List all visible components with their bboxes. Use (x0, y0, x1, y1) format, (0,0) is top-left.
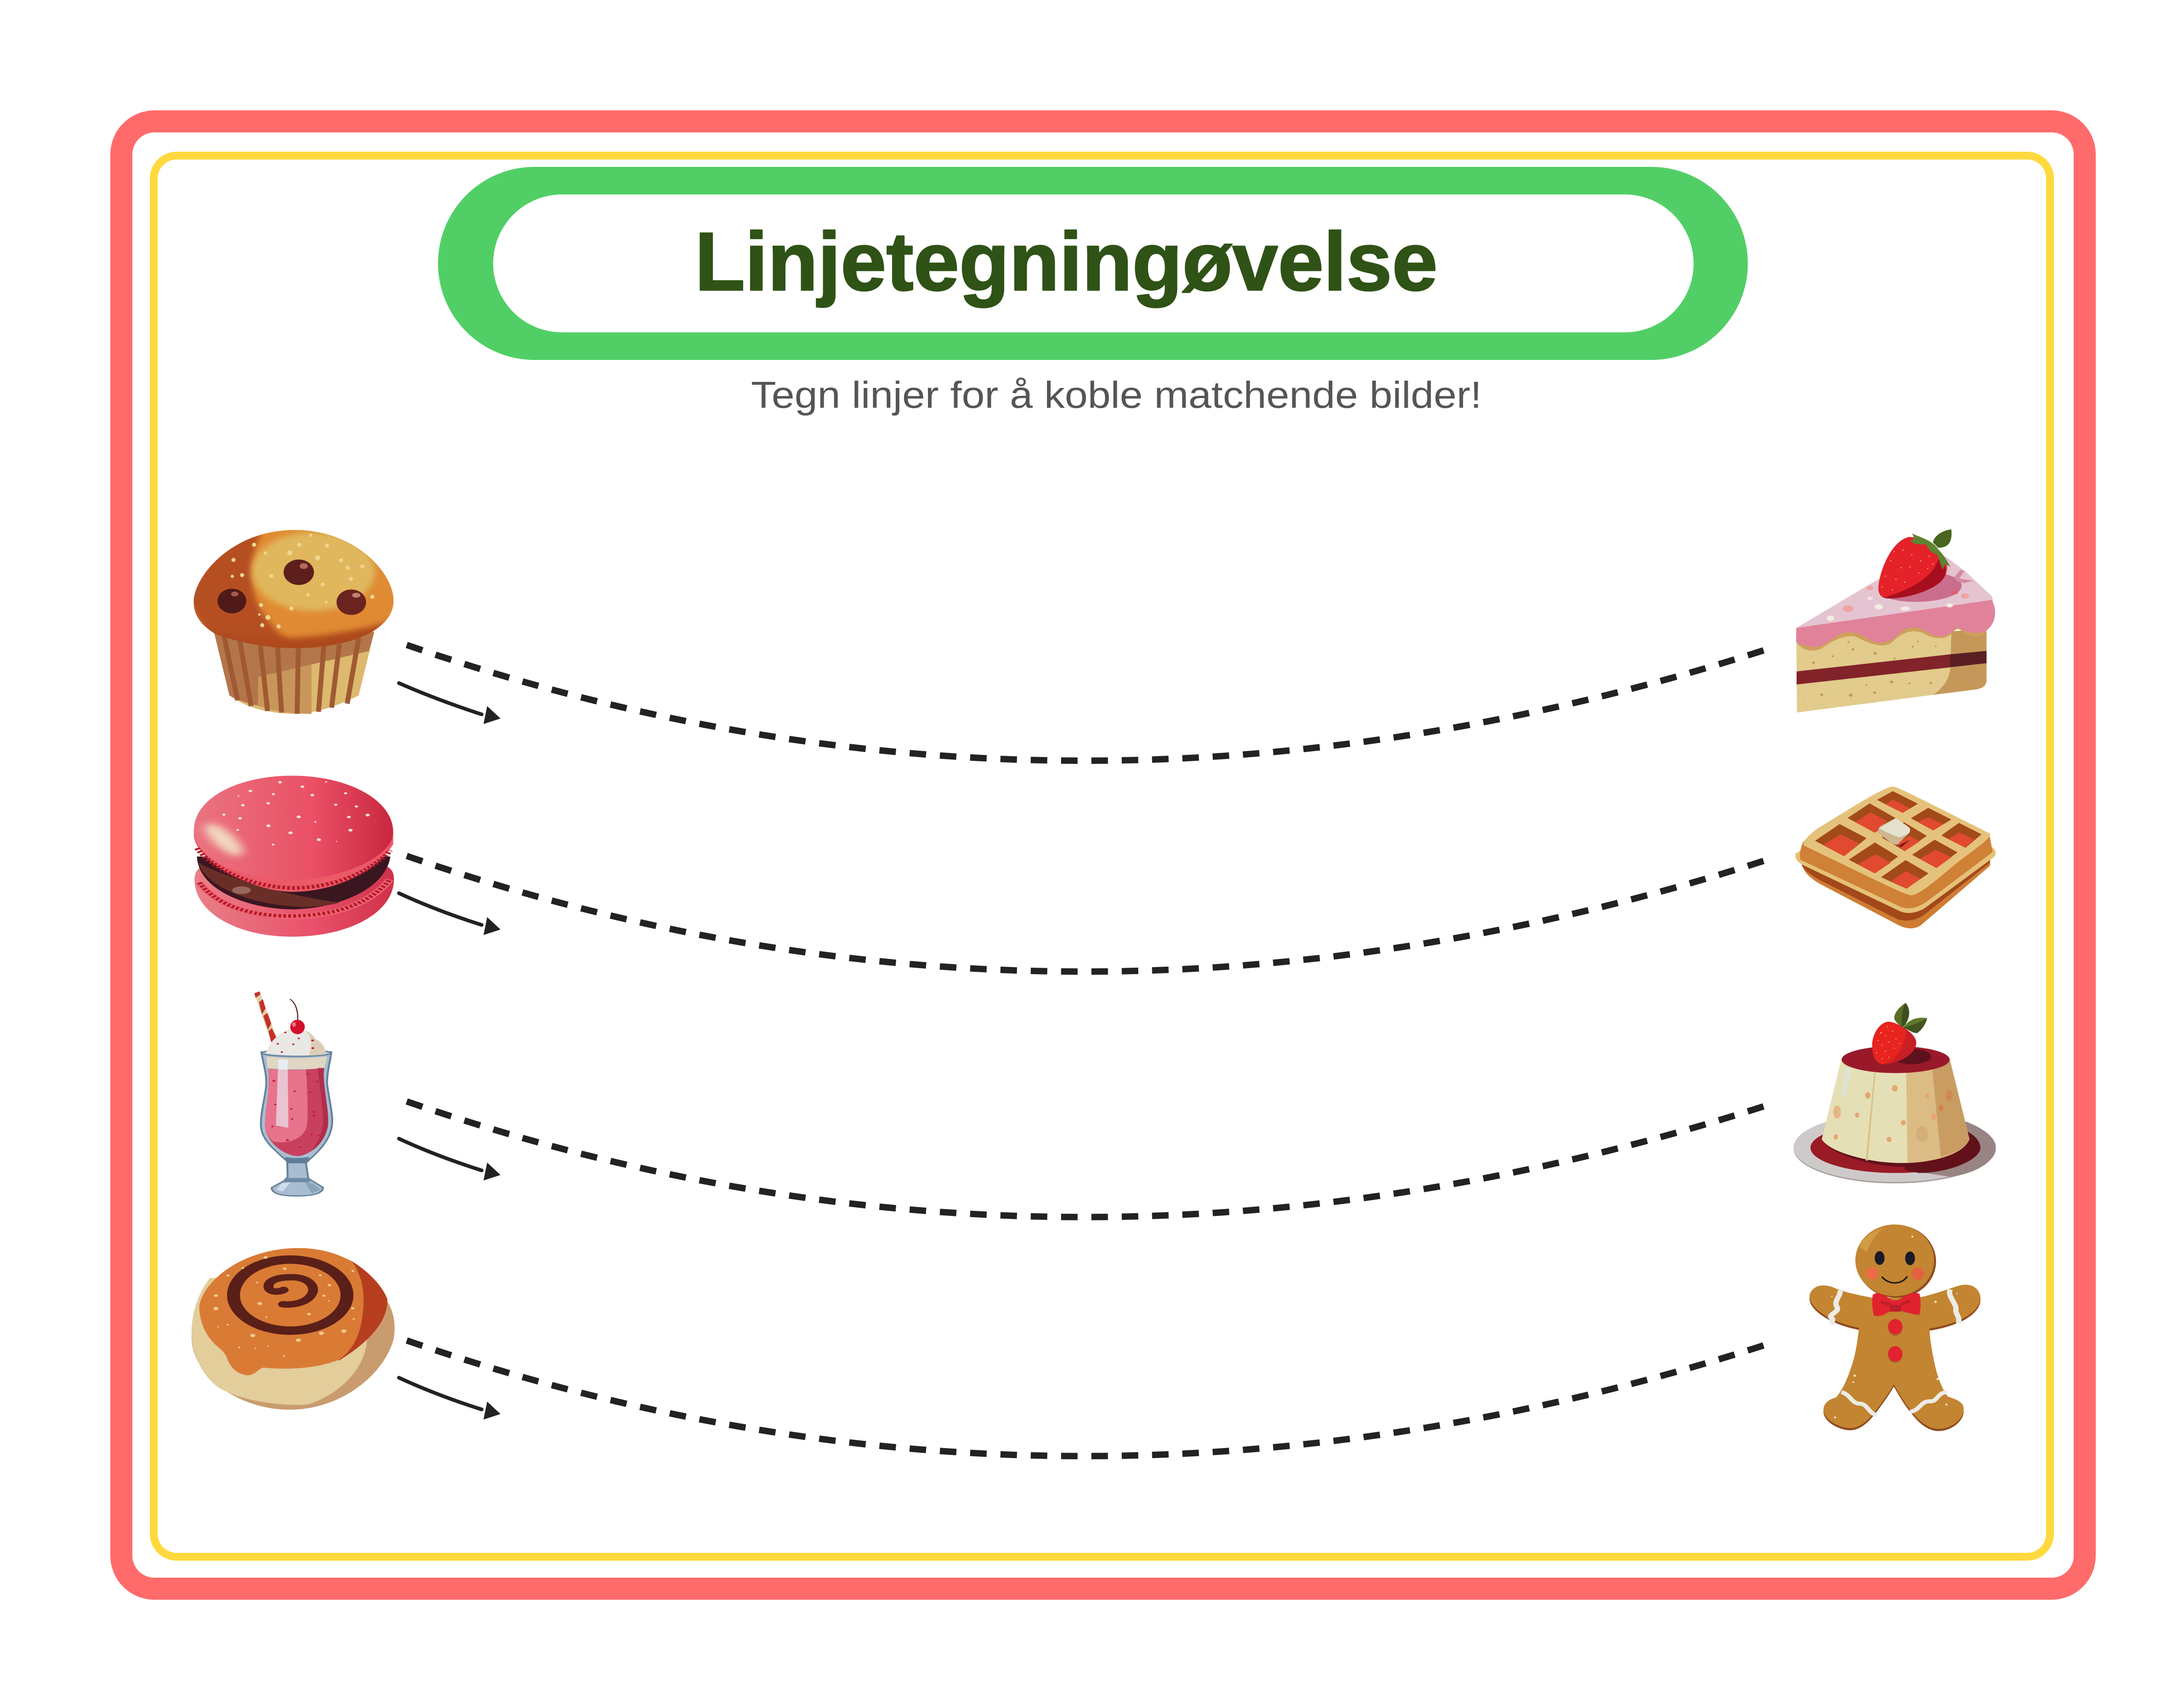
icon: gingerbread man (1809, 1225, 1980, 1431)
subtitle: Tegn linjer for å koble matchende bilder! (751, 374, 1482, 416)
icon: milkshake (254, 992, 332, 1196)
icon: panna cotta (1794, 1003, 1996, 1183)
outer red border (121, 121, 2085, 1589)
arrow 1 (399, 683, 500, 724)
arrow 4 (399, 1378, 500, 1420)
icon: waffle (1795, 787, 1996, 928)
arrow 2 (399, 893, 500, 935)
icon: cinnamon roll (192, 1248, 395, 1410)
banner pill (438, 167, 1748, 360)
dashed tracing line 2 (407, 856, 1770, 972)
icon: strawberry cake slice (1796, 530, 1995, 713)
inner yellow border (154, 155, 2050, 1557)
dashed tracing line 4 (407, 1340, 1770, 1456)
title: Linjetegningøvelse (695, 216, 1438, 308)
arrow 3 (399, 1139, 500, 1180)
dashed tracing line 3 (407, 1101, 1770, 1217)
title banner (438, 167, 1748, 360)
icon: muffin (186, 527, 398, 714)
dashed tracing line 1 (407, 645, 1770, 761)
icon: macaron (194, 776, 394, 937)
